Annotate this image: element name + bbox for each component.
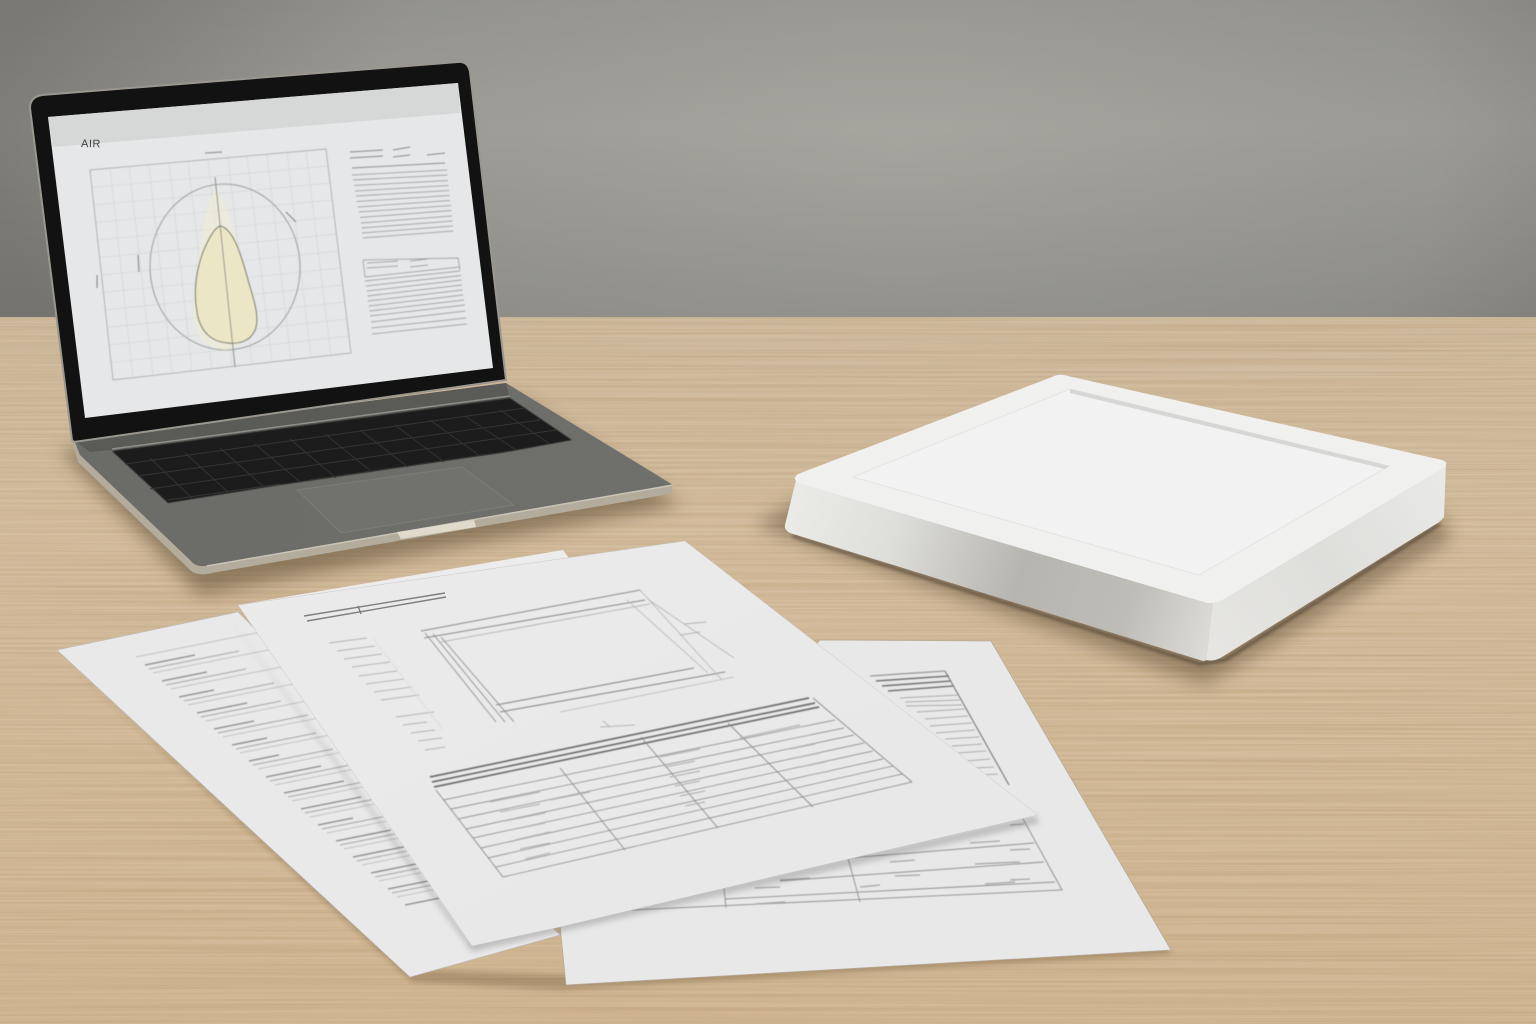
panel top: [795, 375, 1446, 603]
screen: [48, 83, 493, 418]
left sheet text lines: [136, 623, 567, 905]
wooden desk surface: [0, 317, 1536, 1024]
panel right face: [1206, 463, 1446, 661]
white panel contact shadow: [792, 524, 1440, 664]
screen table upper: [350, 147, 454, 238]
front latch: [397, 520, 476, 539]
screen table lower: [363, 258, 467, 334]
header lines: [304, 593, 446, 621]
laptop shadow: [60, 400, 680, 595]
top right lines: [870, 671, 1009, 785]
laptop lid: [30, 62, 506, 442]
touchpad: [297, 467, 514, 533]
screen chart: [90, 149, 351, 380]
plan drawing: [421, 590, 734, 727]
main sheet table: [430, 698, 912, 877]
papers shadow: [58, 655, 1172, 990]
laptop: [30, 62, 673, 574]
lower table on sheet: [631, 817, 1062, 910]
screen title: AIR: [81, 138, 101, 150]
keyboard: [112, 398, 572, 503]
panel inset: [853, 389, 1389, 575]
wall: [0, 0, 1536, 318]
screen header band: [48, 83, 460, 147]
back right sheet: [560, 640, 1171, 985]
white square panel device: [785, 375, 1446, 661]
folded corner sheet: [238, 550, 572, 620]
white panel shadow: [755, 500, 1450, 685]
left sheet: [57, 612, 567, 977]
laptop base: [72, 383, 673, 574]
panel front face: [785, 480, 1213, 661]
main sheet shadow: [225, 612, 1040, 952]
main centre sheet: [238, 541, 1038, 946]
drawing label column: [329, 638, 445, 750]
